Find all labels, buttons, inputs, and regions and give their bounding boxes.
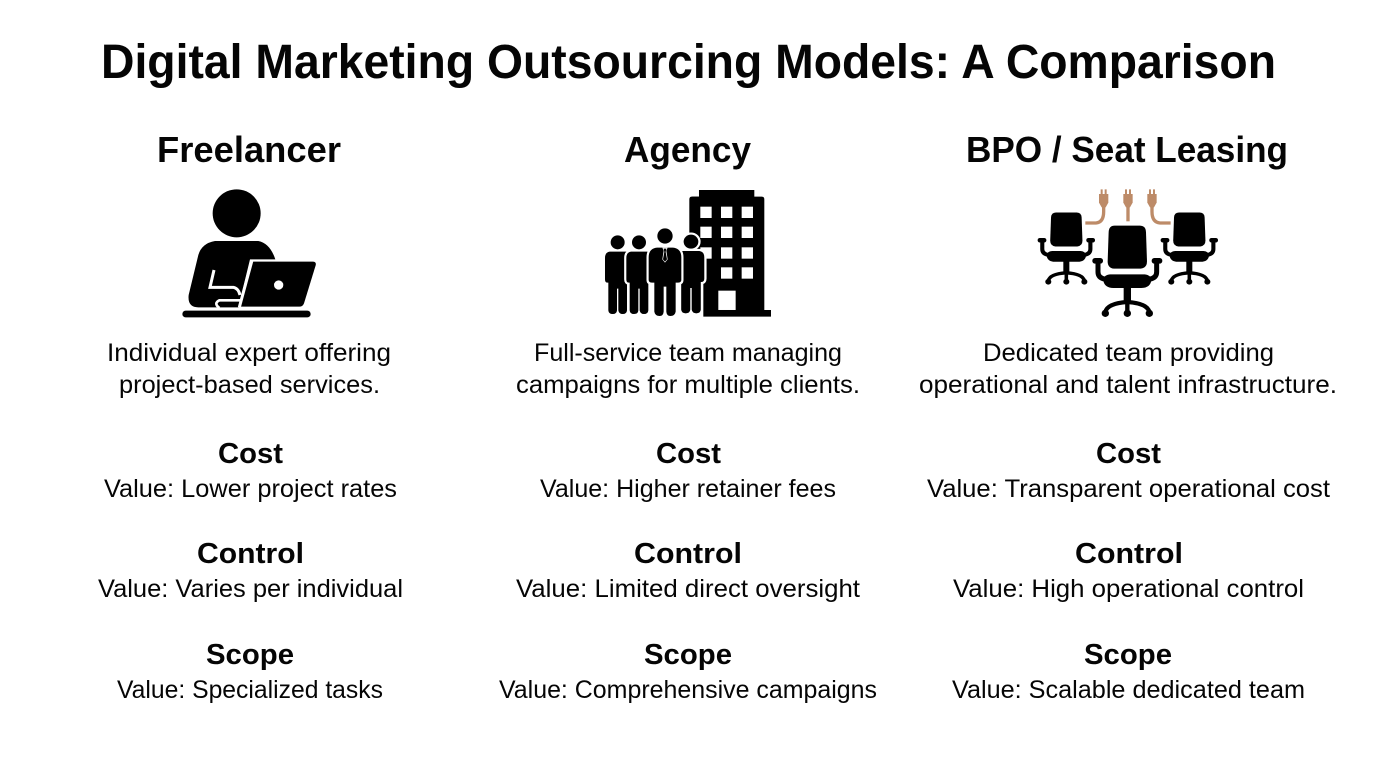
metric: scope: [499, 639, 877, 704]
metric: cost: Value: Transparent operational cost: [927, 475, 1330, 503]
panel: Freelancer column: [98, 129, 403, 704]
metric: scope: [117, 639, 383, 704]
metric: scope: Value: Specialized tasks: [117, 676, 383, 704]
metric: control: [98, 538, 403, 603]
metric: scope: Scope: [1084, 639, 1172, 671]
description: [107, 339, 391, 399]
metric: control: Control: [1075, 538, 1183, 570]
metric: cost: Value: Lower project rates: [104, 475, 397, 503]
description: [516, 339, 860, 399]
description: operational and talent infrastructure.: [919, 371, 1337, 399]
metric: control: Value: Varies per individual: [98, 575, 403, 603]
icon: person working at laptop: [182, 189, 316, 317]
metric: cost: Cost: [1096, 438, 1161, 470]
panel: BPO / Seat Leasing column: [919, 129, 1337, 704]
description: [919, 339, 1337, 399]
description: project-based services.: [119, 371, 380, 399]
metric: scope: [952, 639, 1305, 704]
metric: scope: Value: Comprehensive campaigns: [499, 676, 877, 704]
metric: control: Value: High operational control: [953, 575, 1304, 603]
metric: scope: Value: Scalable dedicated team: [952, 676, 1305, 704]
metric: scope: Scope: [206, 639, 294, 671]
metric: control: [953, 538, 1304, 603]
title: Digital Marketing Outsourcing Models: A Comparison: [101, 36, 1276, 89]
heading: Freelancer: Freelancer: [157, 129, 341, 170]
description: Dedicated team providing: [983, 339, 1274, 367]
metric: cost: [104, 438, 397, 503]
description: Individual expert offering: [107, 339, 391, 367]
icon: team in front of office building: [605, 190, 771, 317]
metric: cost: [927, 438, 1330, 503]
panel: Agency column: [499, 129, 877, 704]
heading: Agency: Agency: [624, 129, 751, 170]
heading: BPO / Seat Leasing: BPO / Seat Leasing: [966, 129, 1288, 170]
metric: scope: Scope: [644, 639, 732, 671]
metric: cost: Cost: [656, 438, 721, 470]
metric: control: Control: [197, 538, 304, 570]
metric: control: [516, 538, 860, 603]
metric: cost: Value: Higher retainer fees: [540, 475, 836, 503]
icon: three office chairs with power plugs: [1038, 189, 1218, 317]
metric: cost: [540, 438, 836, 503]
metric: cost: Cost: [218, 438, 283, 470]
metric: control: Value: Limited direct oversight: [516, 575, 860, 603]
description: Full-service team managing: [534, 339, 842, 367]
description: campaigns for multiple clients.: [516, 371, 860, 399]
metric: control: Control: [634, 538, 742, 570]
